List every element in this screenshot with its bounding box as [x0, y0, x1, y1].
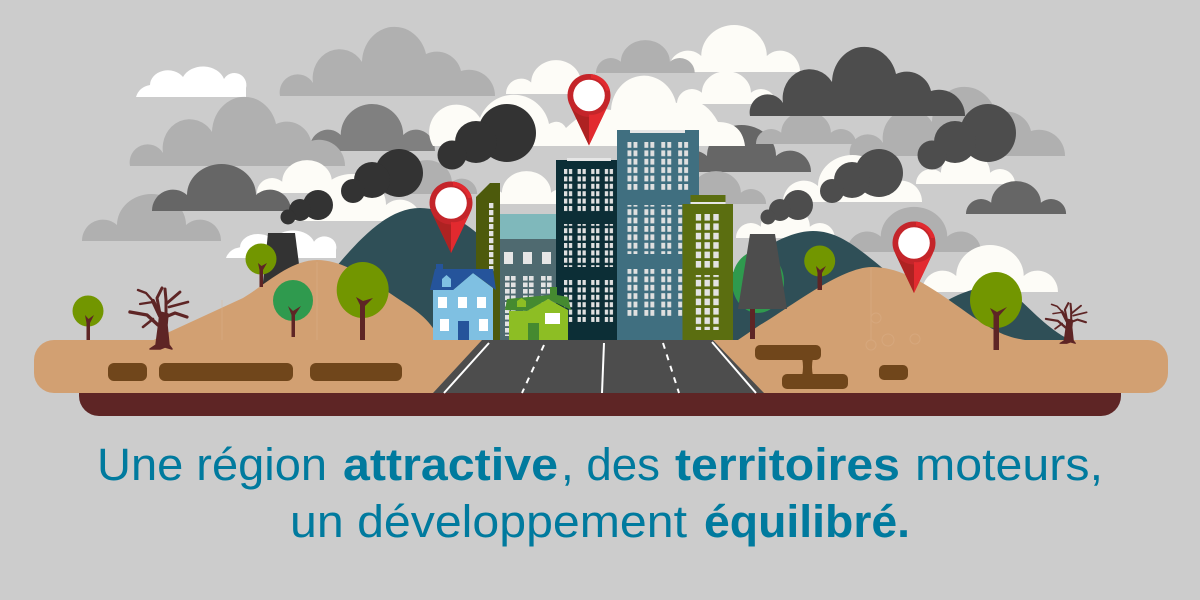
- building: blue tower: [617, 130, 699, 340]
- brown underground patches right: [755, 345, 908, 389]
- ground: [34, 260, 1168, 416]
- dead tree: left: [130, 288, 188, 349]
- cloud: white top left: [136, 66, 246, 97]
- smoke: right middle: [820, 149, 903, 203]
- cloud: white top centre: [506, 60, 606, 94]
- tree: large green behind tower: [732, 251, 784, 313]
- smoke: left small: [280, 190, 333, 224]
- platform underside: [79, 393, 1121, 416]
- cloud: white behind right chimney: [736, 205, 835, 238]
- cloud: very dark right: [750, 47, 965, 116]
- title: Une région: [97, 439, 327, 490]
- cloud: white behind buildings: [477, 171, 576, 204]
- trees: [72, 244, 1087, 350]
- building: dark tower: [556, 158, 622, 340]
- cloud: white lower right: [922, 245, 1058, 292]
- smoke: right large: [918, 104, 1016, 170]
- cloud: mid grey: [309, 104, 435, 151]
- house: blue: [430, 264, 496, 340]
- road dashes left: [522, 345, 544, 393]
- tree: small far left: [72, 296, 104, 340]
- cloud: white top right: [668, 25, 800, 72]
- building: grey teal block: [500, 214, 558, 340]
- cloud: white small centre right: [677, 71, 776, 104]
- cloud: white large centre: [429, 76, 745, 146]
- house: green: [505, 287, 571, 340]
- cloud: white behind right smoke: [783, 155, 922, 202]
- road: [433, 340, 764, 393]
- title: [97, 439, 1103, 547]
- cloud: white behind left chimney: [226, 230, 336, 258]
- title: territoires: [675, 439, 900, 490]
- cloud: grey left: [130, 97, 345, 166]
- cloud: grey behind buildings: [666, 171, 766, 204]
- cloud: light grey lower left: [82, 194, 221, 241]
- road centre line: [602, 343, 604, 393]
- clouds: sky layer: [82, 25, 1066, 292]
- mountain: centre right: [700, 231, 885, 340]
- tree: on right hill small: [804, 246, 835, 290]
- faint hill lines: [222, 262, 920, 350]
- cloud: grey top centre: [596, 40, 695, 73]
- building: olive thin tower: [476, 183, 500, 340]
- road dashes right: [663, 343, 679, 393]
- title: équilibré.: [704, 496, 910, 547]
- cloud: grey right large: [850, 87, 1065, 156]
- cloud: dark grey behind buildings: [672, 125, 811, 172]
- map pin: left: [430, 181, 472, 253]
- mountain: left: [335, 208, 500, 340]
- buildings: [430, 130, 733, 340]
- title: , des: [561, 439, 660, 490]
- cloud: white right: [916, 151, 1015, 184]
- hill: left: [150, 260, 470, 345]
- map pin: centre: [568, 74, 610, 146]
- cloud: white left back: [257, 160, 357, 193]
- map pin: right: [892, 221, 936, 293]
- title: un développement: [290, 496, 688, 547]
- dead tree: right: [1046, 303, 1087, 343]
- smoke: right small: [760, 190, 813, 224]
- smoke: left middle: [341, 149, 423, 203]
- cloud: grey centre right: [756, 111, 856, 144]
- tree: green on left hill: [273, 280, 313, 337]
- cloud: white left front: [282, 174, 421, 221]
- cloud: grey top left: [280, 27, 495, 96]
- smoke plumes: [280, 104, 1016, 224]
- cloud: dark grey far right: [966, 181, 1066, 214]
- hill: right: [735, 267, 1025, 342]
- chimney: left: [262, 233, 300, 292]
- tree: conifer right of towers: [738, 234, 787, 339]
- title: moteurs,: [915, 439, 1103, 490]
- tree: large on left hill: [337, 262, 389, 340]
- tree: large on right hill: [970, 272, 1022, 350]
- mountain: far right: [945, 285, 1070, 345]
- brown underground patches left: [108, 363, 402, 381]
- cloud: grey behind left pin: [377, 160, 477, 194]
- platform top: [34, 340, 1168, 393]
- title: attractive: [343, 439, 558, 490]
- road surface: [433, 340, 764, 393]
- road edge right: [712, 342, 756, 393]
- cloud: grey behind right pin: [847, 207, 981, 252]
- building: green tower: [682, 195, 733, 340]
- tree: on left hill small: [246, 244, 276, 287]
- cloud: dark grey left: [152, 164, 291, 211]
- road edge left: [444, 343, 489, 393]
- smoke: top left centre: [438, 104, 536, 170]
- mountains: [335, 208, 1070, 345]
